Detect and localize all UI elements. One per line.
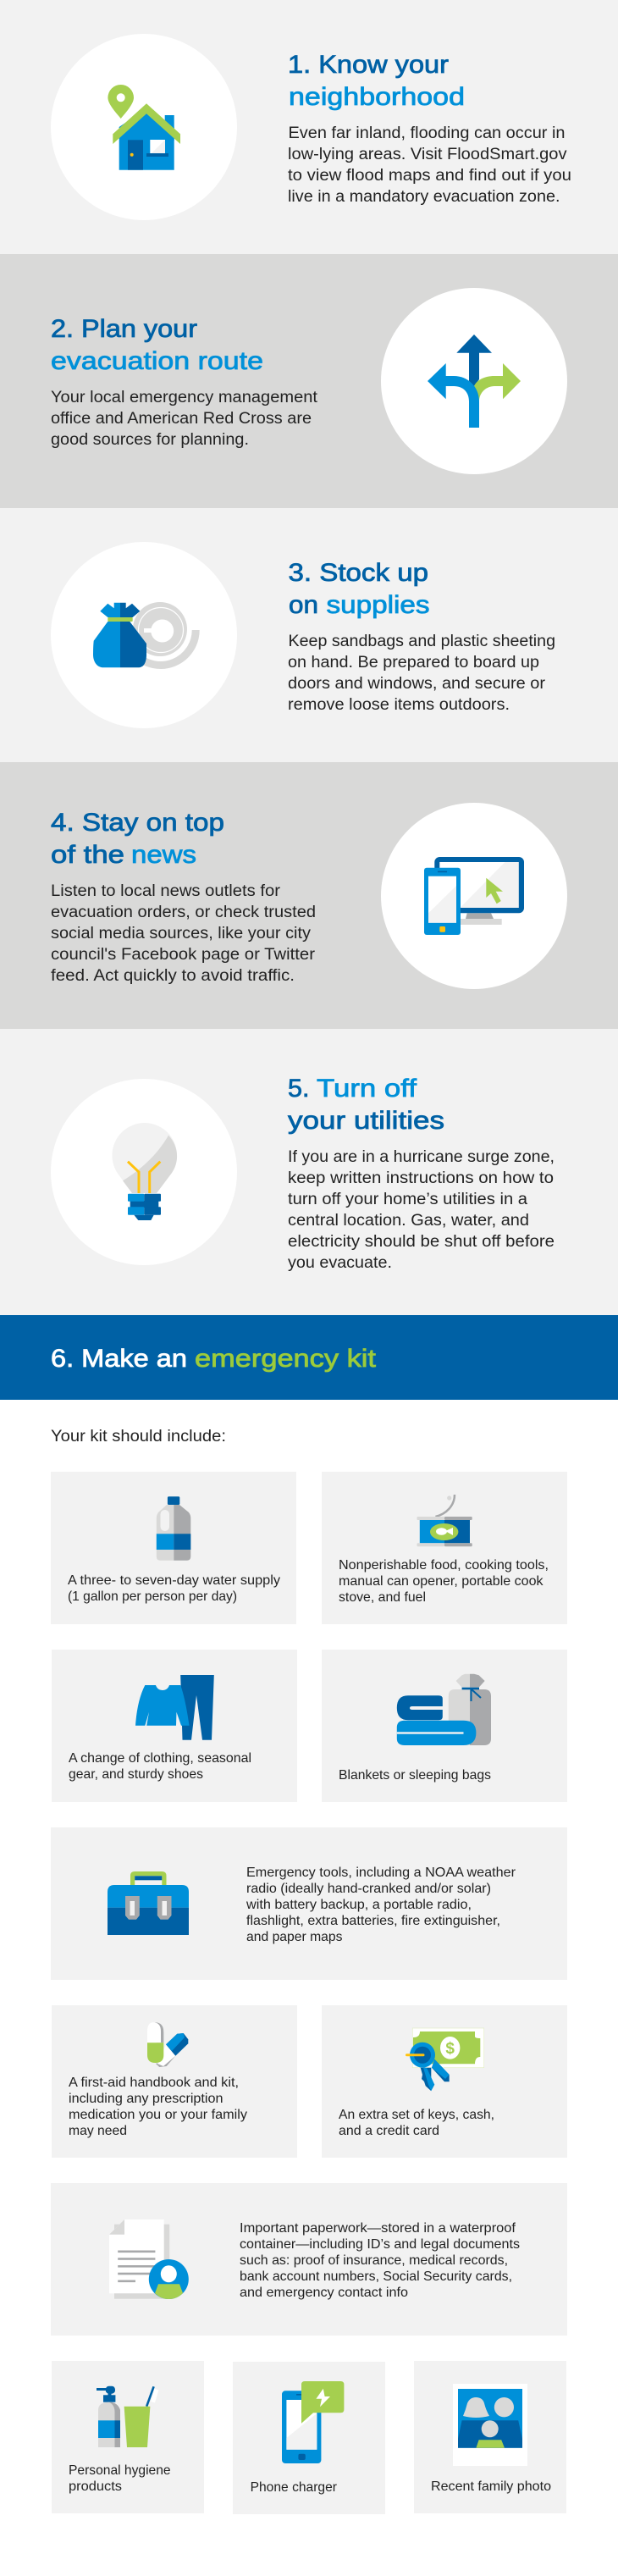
text: nonperishable food: manual can opener, portable cook bbox=[339, 1574, 544, 1589]
card: nonperishable food bbox=[322, 1472, 567, 1624]
text: step 5 body bbox=[288, 1148, 555, 1272]
text: your kit should include: Your kit should include: bbox=[51, 1428, 226, 1446]
text: clothing: gear, and sturdy shoes bbox=[69, 1767, 203, 1782]
card: clothing bbox=[52, 1650, 297, 1802]
heading: step 3: on bbox=[289, 591, 318, 619]
icon: water bottle bbox=[157, 1496, 190, 1561]
text: step 1 body: low-lying areas. Visit FloodSmart.gov bbox=[288, 146, 567, 163]
heading: step 1 bbox=[288, 51, 465, 111]
heading: step 5: Turn off bbox=[317, 1075, 417, 1103]
text: step 5 body: keep written instructions on how to bbox=[288, 1169, 554, 1187]
heading: step 4 bbox=[51, 809, 224, 869]
text: water supply bbox=[68, 1573, 280, 1604]
heading: step 5: your utilities bbox=[288, 1107, 444, 1135]
icon: monitor and smartphone bbox=[424, 857, 524, 935]
panel: step 1 know your neighborhood bbox=[0, 0, 618, 254]
text: step 2 body: good sources for planning. bbox=[51, 431, 249, 449]
text: important paperwork: bank account numbers, Social Security cards, bbox=[240, 2269, 512, 2284]
text: keys and cash: An extra set of keys, cash, bbox=[339, 2108, 494, 2122]
text: step 1 body: to view flood maps and find out if you bbox=[288, 167, 571, 185]
icon: sandbag and plastic sheeting roll bbox=[93, 602, 196, 667]
card: blankets bbox=[322, 1650, 567, 1802]
card: water supply bbox=[51, 1472, 296, 1624]
text: step 3 body: on hand. Be prepared to board up bbox=[288, 654, 539, 672]
heading: step 5 bbox=[288, 1075, 444, 1135]
icon: blankets and sleeping bag bbox=[397, 1674, 491, 1745]
banner: step 6 make an emergency kit bbox=[0, 1315, 618, 1400]
text: step 3 body: remove loose items outdoors. bbox=[288, 696, 510, 714]
card: family photo bbox=[414, 2361, 566, 2513]
text: step 5 body: electricity should be shut off before bbox=[288, 1233, 555, 1251]
card: personal hygiene bbox=[52, 2361, 204, 2513]
text: keys and cash bbox=[339, 2108, 494, 2138]
icon: documents and ID bbox=[109, 2219, 189, 2299]
heading: step 3: supplies bbox=[327, 591, 430, 619]
text: phone charger: Phone charger bbox=[251, 2480, 338, 2495]
icon: keys and money bbox=[406, 2028, 484, 2091]
text: step 3 body: Keep sandbags and plastic sheeting bbox=[288, 633, 555, 650]
text: clothing bbox=[69, 1751, 251, 1782]
icon: can of fish bbox=[417, 1495, 472, 1546]
text: important paperwork: Important paperwork—stored in a waterproof bbox=[240, 2221, 516, 2236]
text: step 1 body: Even far inland, flooding can occur in bbox=[288, 124, 566, 142]
card: emergency tools bbox=[51, 1827, 567, 1980]
text: step 5 body: central location. Gas, water, and bbox=[288, 1212, 529, 1230]
text: nonperishable food bbox=[339, 1558, 549, 1605]
text: water supply: A three- to seven-day water supply bbox=[68, 1573, 280, 1588]
icon: branching arrows bbox=[428, 334, 521, 428]
heading: step 4: news bbox=[131, 841, 196, 869]
text: family photo: Recent family photo bbox=[431, 2479, 551, 2494]
text: first aid bbox=[69, 2076, 247, 2138]
heading: step 4: of the bbox=[51, 841, 124, 869]
text: personal hygiene: products bbox=[69, 2479, 122, 2494]
text: step 4 body bbox=[51, 882, 316, 985]
text: step 4 body: feed. Act quickly to avoid traffic. bbox=[51, 967, 295, 985]
text: keys and cash: and a credit card bbox=[339, 2124, 439, 2138]
text: nonperishable food: Nonperishable food, cooking tools, bbox=[339, 1558, 549, 1573]
text: step 2 body bbox=[51, 389, 318, 449]
heading: step 4: 4. Stay on top bbox=[51, 809, 224, 837]
icon: phone with charging bubble bbox=[282, 2381, 344, 2463]
card: keys and cash bbox=[322, 2005, 567, 2158]
text: step 4 body: social media sources, like your city bbox=[51, 925, 312, 943]
heading: step 1: 1. Know your bbox=[288, 51, 449, 79]
panel: step 2 plan your evacuation route bbox=[0, 254, 618, 508]
panel: step 5 turn off your utilities bbox=[0, 1029, 618, 1315]
heading: step 2 bbox=[51, 315, 263, 375]
text: important paperwork: such as: proof of insurance, medical records, bbox=[240, 2253, 508, 2268]
icon: family photo bbox=[453, 2384, 527, 2466]
text: step 2 body: office and American Red Cross are bbox=[51, 410, 312, 428]
text: step 4 body: council's Facebook page or Twitter bbox=[51, 946, 316, 964]
text: emergency tools: Emergency tools, including a NOAA weather bbox=[246, 1866, 516, 1880]
text: step 4 body: Listen to local news outlets for bbox=[51, 882, 281, 900]
icon: house with location pin bbox=[108, 85, 180, 170]
text: first aid: medication you or your family bbox=[69, 2108, 247, 2122]
text: step 1 body bbox=[288, 124, 571, 206]
icon: pills bbox=[147, 2022, 188, 2067]
icon: soap and toothbrush in cup bbox=[97, 2386, 157, 2447]
panel: step 4 stay on top of the news bbox=[0, 762, 618, 1029]
icon: shirt and pants bbox=[135, 1675, 214, 1740]
text: personal hygiene: Personal hygiene bbox=[69, 2463, 171, 2478]
text: step 3 body: doors and windows, and secure or bbox=[288, 675, 546, 693]
text: step 3 body bbox=[288, 633, 555, 714]
card: first aid bbox=[52, 2005, 297, 2158]
card: phone charger bbox=[233, 2362, 385, 2514]
text: important paperwork: container—including ID’s and legal documents bbox=[240, 2237, 520, 2252]
text: emergency tools: with battery backup, a portable radio, bbox=[246, 1898, 472, 1912]
text: emergency tools: and paper maps bbox=[246, 1930, 342, 1944]
text: important paperwork bbox=[240, 2221, 520, 2300]
text: step 4 body: evacuation orders, or check trusted bbox=[51, 904, 316, 921]
text: step 5 body: you evacuate. bbox=[288, 1254, 392, 1272]
icon: keys and money: $ bbox=[445, 2040, 455, 2058]
panel: step 3 stock up on supplies bbox=[0, 508, 618, 762]
heading: step 3 bbox=[288, 559, 430, 619]
text: emergency tools: radio (ideally hand-cranked and/or solar) bbox=[246, 1882, 491, 1896]
text: first aid: may need bbox=[69, 2124, 127, 2138]
text: nonperishable food: stove, and fuel bbox=[339, 1590, 426, 1605]
text: personal hygiene bbox=[69, 2463, 171, 2494]
text: step 5 body: If you are in a hurricane surge zone, bbox=[288, 1148, 555, 1166]
text: emergency tools: flashlight, extra batteries, fire extinguisher, bbox=[246, 1914, 500, 1928]
icon: light bulb bbox=[112, 1123, 177, 1220]
text: water supply: (1 gallon per person per day) bbox=[68, 1589, 237, 1604]
heading: step 2: evacuation route bbox=[51, 347, 263, 375]
text: step 2 body: Your local emergency management bbox=[51, 389, 318, 406]
text: step 1 body: live in a mandatory evacuation zone. bbox=[288, 188, 560, 206]
text: first aid: A first-aid handbook and kit, bbox=[69, 2076, 239, 2090]
heading: step 5: 5. bbox=[288, 1075, 310, 1103]
heading: step 2: 2. Plan your bbox=[51, 315, 197, 343]
heading: step 1: neighborhood bbox=[289, 83, 465, 111]
banner: step 6 make an emergency kit: 6. Make an bbox=[51, 1345, 187, 1373]
text: first aid: including any prescription bbox=[69, 2092, 223, 2106]
banner: step 6 make an emergency kit: emergency kit bbox=[195, 1345, 377, 1373]
text: step 5 body: turn off your home’s utilities in a bbox=[288, 1191, 527, 1208]
text: clothing: A change of clothing, seasonal bbox=[69, 1751, 251, 1766]
text: emergency tools bbox=[246, 1866, 516, 1944]
text: blankets: Blankets or sleeping bags bbox=[339, 1768, 491, 1783]
icon: toolbox bbox=[108, 1871, 189, 1935]
text: important paperwork: and emergency contact info bbox=[240, 2286, 408, 2300]
card: important paperwork bbox=[51, 2183, 567, 2336]
heading: step 3: 3. Stock up bbox=[288, 559, 428, 587]
